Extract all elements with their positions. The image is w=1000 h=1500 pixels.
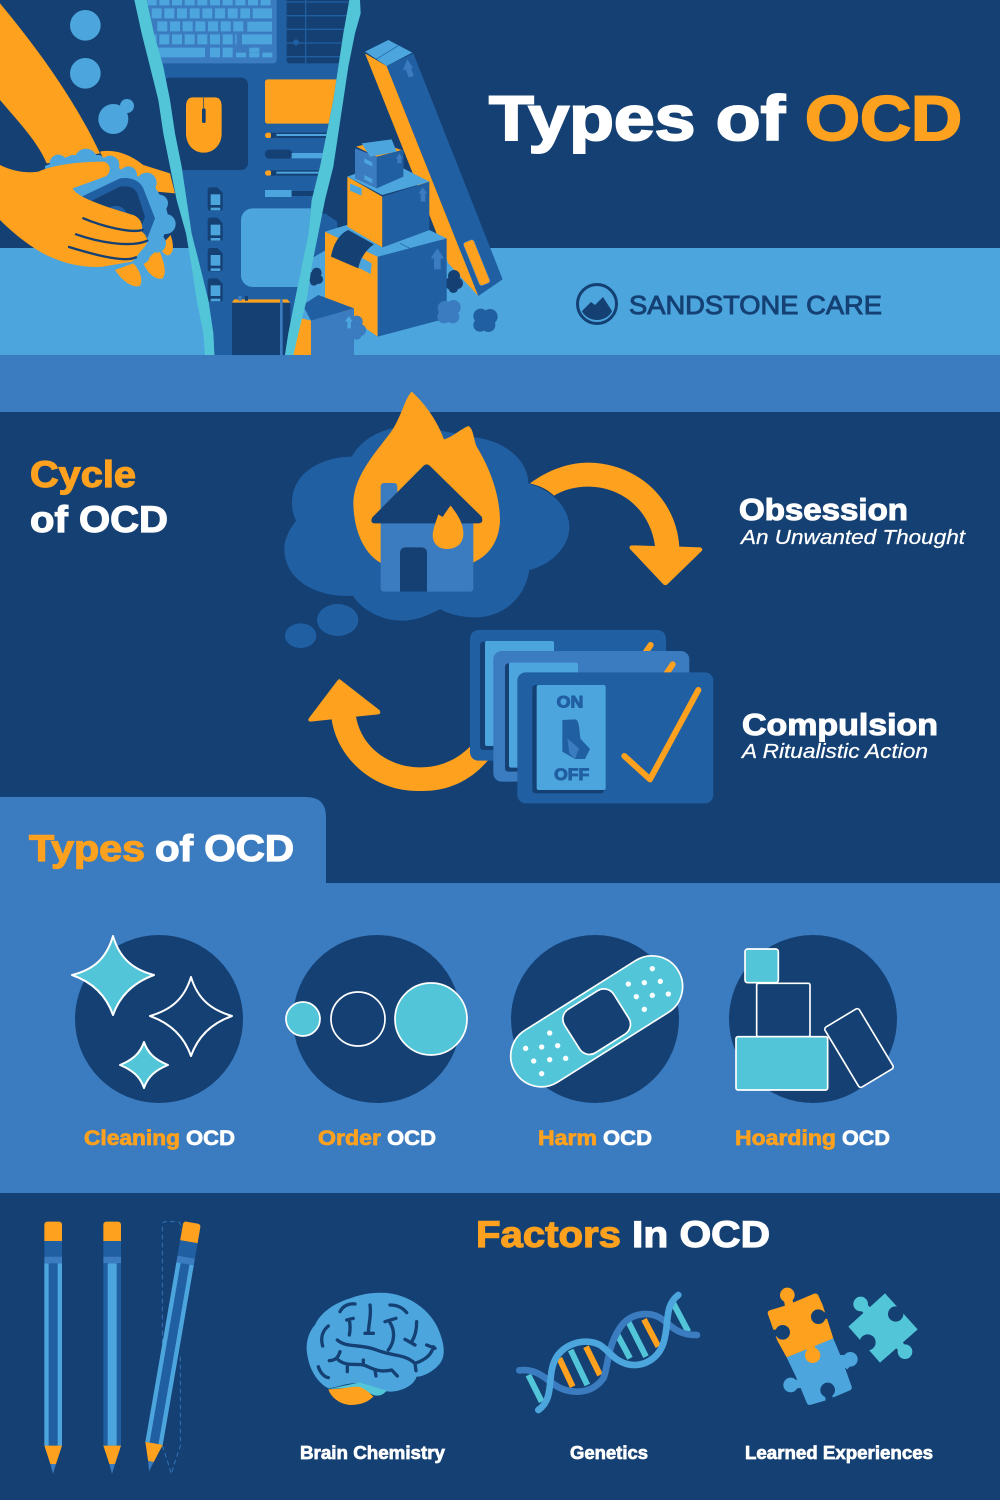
label: order OCD: Order [318, 1127, 381, 1150]
heading: types of OCD: of OCD [155, 828, 294, 869]
label: cleaning OCD: Cleaning [84, 1127, 180, 1150]
panel: hero [0, 0, 1000, 412]
torn edge right [285, 0, 361, 355]
puzzle piece: blue [783, 1338, 858, 1405]
light switch cards: OFF [554, 765, 589, 784]
icon: brain [307, 1293, 444, 1405]
illustration: settings panel [241, 79, 336, 287]
label: order OCD [318, 1127, 436, 1150]
light switch cards [470, 630, 713, 803]
heading: types of OCD [29, 828, 294, 869]
label: compulsion [741, 707, 938, 763]
illustration: hand washing [0, 3, 176, 286]
label: harm OCD: Harm [538, 1127, 597, 1150]
heading: factors in OCD [476, 1214, 770, 1255]
label: obsession: Obsession [739, 492, 908, 527]
title [489, 84, 962, 154]
heading: factors in OCD: In OCD [632, 1214, 770, 1255]
light switch cards: ON [557, 693, 583, 712]
puzzle piece: teal [848, 1293, 918, 1363]
illustration: three pencils [44, 1221, 201, 1474]
label: harm OCD [538, 1127, 652, 1150]
label: hoarding OCD: OCD [842, 1127, 890, 1150]
illustration: stacked boxes [293, 40, 503, 355]
heading: factors in OCD: Factors [476, 1214, 621, 1255]
label: cleaning OCD [84, 1127, 235, 1150]
panel: types of OCD [0, 797, 1000, 1193]
icon: puzzle pieces [768, 1288, 918, 1405]
pencil three tilted with dashed outline [141, 1221, 201, 1474]
label: hoarding OCD: Hoarding [735, 1127, 836, 1150]
arrow: obsession to compulsion [530, 463, 702, 585]
label: harm OCD: OCD [603, 1127, 652, 1150]
icon: DNA helix [519, 1295, 697, 1410]
icon: order circles [286, 935, 467, 1103]
arrow: compulsion to obsession [308, 679, 488, 791]
label: obsession [739, 492, 967, 549]
logo: Sandstone Care: SANDSTONE CARE [629, 290, 882, 320]
title: Types of [489, 84, 786, 154]
heading: cycle of OCD: Cycle [30, 454, 136, 495]
label: brain chemistry: Brain Chemistry [300, 1443, 445, 1463]
label: obsession: An Unwanted Thought [740, 527, 967, 549]
house on fire [371, 464, 482, 592]
pencil one [44, 1222, 62, 1474]
label: compulsion: Compulsion [742, 707, 938, 742]
pencil two [103, 1222, 121, 1474]
label: compulsion: A Ritualistic Action [741, 741, 928, 763]
label: cleaning OCD: OCD [186, 1127, 235, 1150]
illustration: notebook [286, 0, 350, 64]
diagram: cycle of OCD [284, 392, 713, 803]
label: order OCD: OCD [387, 1127, 436, 1150]
heading: types of OCD: Types [29, 828, 145, 869]
flame [353, 392, 500, 563]
panel: torn strip desk [146, 0, 349, 355]
puzzle piece: orange [768, 1288, 833, 1363]
illustration: mouse pad and mouse [163, 78, 248, 170]
label: hoarding OCD [735, 1127, 890, 1150]
illustration: dark box [232, 296, 290, 356]
illustration: memory cards [208, 187, 223, 302]
icon: harm bandage [499, 935, 694, 1103]
torn edge left [134, 0, 214, 355]
label: genetics: Genetics [570, 1443, 648, 1463]
heading: cycle of OCD [30, 454, 168, 540]
title: OCD [805, 84, 962, 154]
icon: cleaning sparkles [72, 935, 243, 1103]
label: learned experiences: Learned Experiences [745, 1443, 933, 1463]
illustration: keyboard [133, 0, 277, 63]
heading: cycle of OCD: of OCD [30, 499, 168, 540]
icon: hoarding boxes [729, 935, 897, 1103]
thought cloud [284, 426, 569, 648]
logo: Sandstone Care [578, 284, 882, 324]
